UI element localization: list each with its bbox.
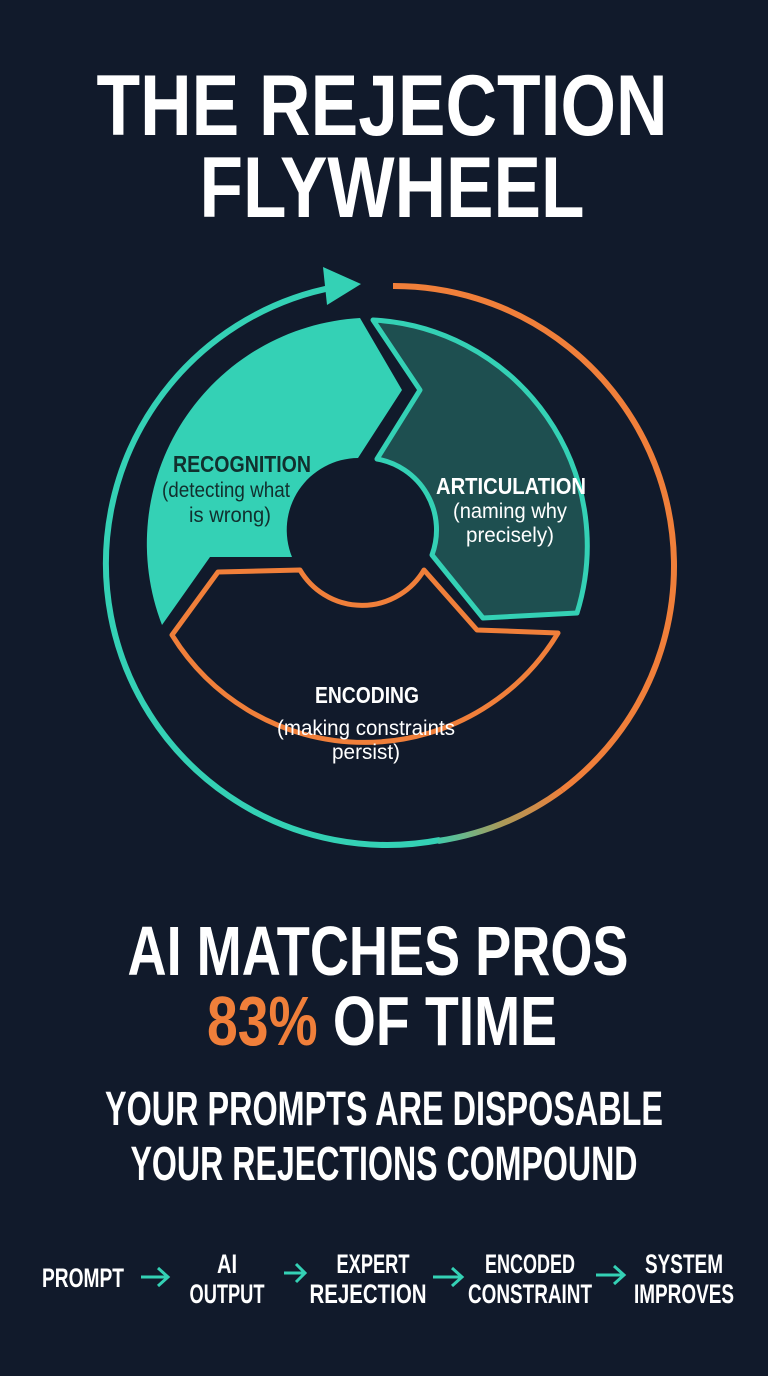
headline stat bbox=[128, 912, 628, 1060]
arrow 4 bbox=[596, 1266, 624, 1284]
segment: articulation: ARTICULATION bbox=[436, 473, 586, 499]
outer ring orange arc bbox=[393, 286, 674, 790]
icon: ring arrowhead bbox=[323, 267, 361, 305]
segment: recognition: (detecting what bbox=[162, 479, 290, 502]
segment: articulation: (naming why bbox=[453, 500, 567, 523]
step: ai output: OUTPUT bbox=[190, 1279, 265, 1309]
segment: articulation bbox=[373, 320, 587, 618]
outer ring teal arc bbox=[106, 287, 440, 845]
title: THE REJECTION bbox=[96, 58, 668, 154]
step: expert rejection: REJECTION bbox=[310, 1279, 426, 1309]
arrow 3 bbox=[433, 1268, 462, 1286]
title bbox=[96, 58, 668, 236]
step: ai output: AI bbox=[217, 1249, 237, 1279]
headline stat: AI MATCHES PROS bbox=[128, 912, 628, 990]
flywheel diagram bbox=[106, 267, 674, 845]
step: ai output bbox=[190, 1249, 265, 1309]
segment: recognition: is wrong) bbox=[189, 504, 271, 527]
title: FLYWHEEL bbox=[200, 140, 584, 236]
step: expert rejection bbox=[310, 1249, 426, 1309]
arrow 1 bbox=[141, 1268, 168, 1286]
arrow 2 bbox=[284, 1264, 305, 1282]
segment: articulation: precisely) bbox=[466, 524, 554, 547]
outer ring gradient arc bbox=[438, 790, 562, 841]
segment: recognition bbox=[147, 318, 402, 625]
step: encoded constraint: ENCODED bbox=[485, 1249, 575, 1279]
step: system improves: SYSTEM bbox=[645, 1249, 723, 1279]
step: encoded constraint bbox=[468, 1249, 592, 1309]
segment: encoding: persist) bbox=[332, 741, 400, 764]
segment: recognition: RECOGNITION bbox=[173, 451, 311, 477]
segment: encoding: ENCODING bbox=[315, 682, 419, 708]
subheading bbox=[105, 1083, 663, 1191]
step: system improves bbox=[634, 1249, 734, 1309]
headline stat: 83% OF TIME bbox=[207, 982, 557, 1060]
step: encoded constraint: CONSTRAINT bbox=[468, 1279, 592, 1309]
segment: encoding: (making constraints bbox=[277, 717, 455, 740]
step: expert rejection: EXPERT bbox=[336, 1249, 410, 1279]
segment: encoding bbox=[172, 570, 558, 764]
process flow bbox=[42, 1249, 734, 1309]
step: prompt: PROMPT bbox=[42, 1263, 124, 1293]
